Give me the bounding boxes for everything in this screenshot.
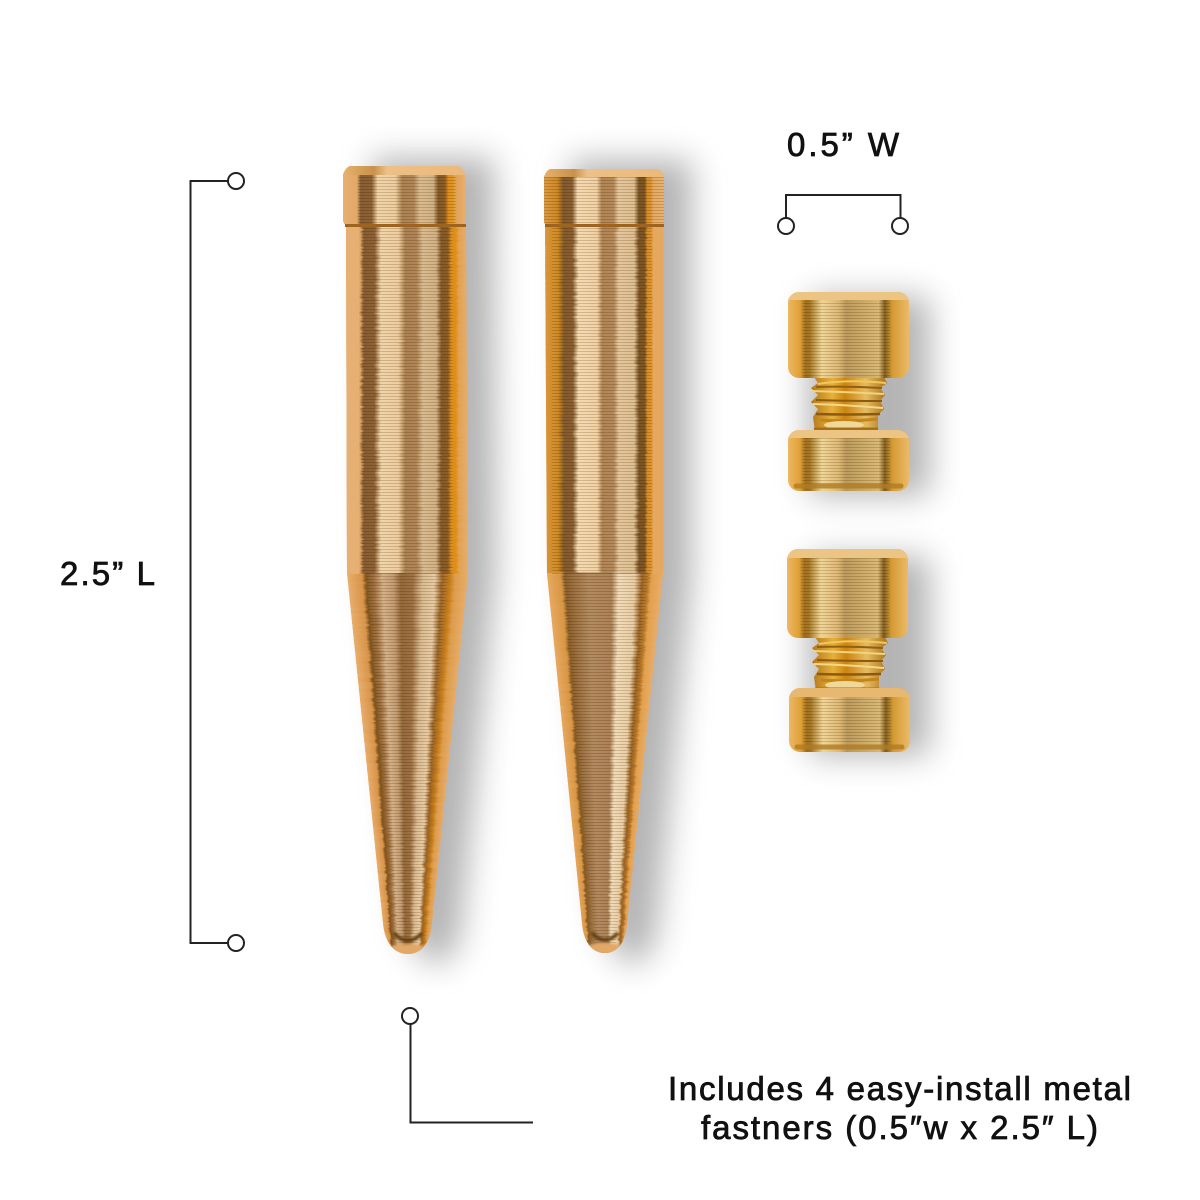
spike 1 body [346,227,468,954]
callout text [668,1070,1131,1146]
drop shadows [372,158,930,964]
fastener 2 top cap [787,549,908,638]
thread 2 [812,637,888,691]
fastener 1 bottom cap [788,430,909,491]
width bracket [778,195,908,234]
fastener 1 [788,292,909,491]
callout text: fastners (0.5″w x 2.5″ L) [701,1109,1098,1146]
spike 1 [340,166,475,960]
callout text: Includes 4 easy-install metal [668,1070,1131,1107]
spike 2 cap [544,169,664,227]
width label: 0.5” W [787,126,900,163]
thread 1 [811,377,887,431]
fastener 2 [787,549,910,752]
length label: 2.5” L [60,555,155,592]
spike 2 body [545,227,663,953]
fastener 2 bottom cap [789,688,910,752]
infographic canvas [61,132,1130,1146]
spike 1 cap [343,166,466,227]
callout leader line [402,1008,533,1122]
length bracket [190,173,244,951]
fastener 1 top cap [788,292,909,378]
spike 2 [540,169,670,960]
